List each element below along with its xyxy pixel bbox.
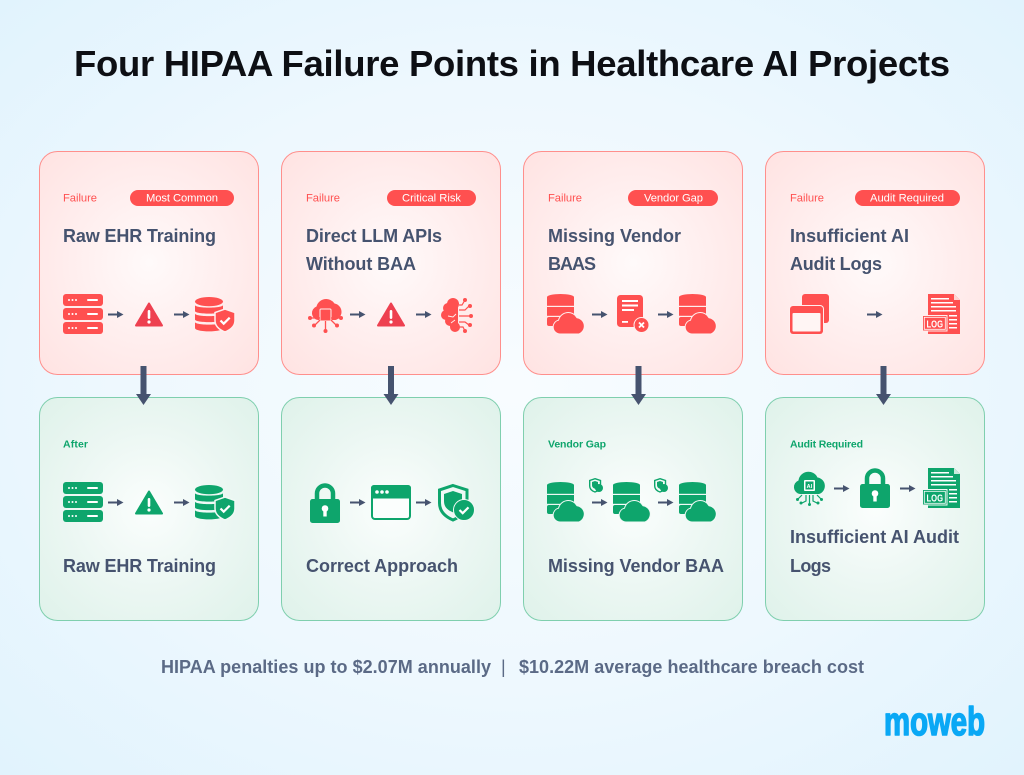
badge: audit required: Audit Required xyxy=(870,192,944,204)
arrow xyxy=(592,314,602,316)
icon: server rack xyxy=(63,482,103,522)
panel: fix 3 vendor gap xyxy=(524,398,742,620)
heading: Raw EHR Training xyxy=(63,556,216,576)
panel: failure 2 direct LLM APIs xyxy=(282,152,500,374)
heading line two: BAAS xyxy=(548,254,596,274)
icon: cloud network xyxy=(308,299,343,333)
arrow xyxy=(658,314,668,316)
badge: critical risk: Critical Risk xyxy=(402,192,461,204)
arrow xyxy=(834,488,844,490)
arrow: failure 4 to audit logs xyxy=(876,366,891,405)
label: after: After xyxy=(63,438,88,450)
heading: Missing Vendor xyxy=(548,226,681,246)
icon: database cloud xyxy=(679,294,716,334)
icon: log document: LOG xyxy=(926,318,943,330)
icon: database cloud xyxy=(679,482,716,522)
label: audit required: Audit Required xyxy=(790,438,863,450)
icon: log document xyxy=(922,294,960,334)
heading: Correct Approach xyxy=(306,556,458,576)
icon: warning triangle xyxy=(136,304,162,326)
arrow xyxy=(108,502,118,504)
arrow: failure 2 to correct approach xyxy=(384,366,398,405)
logo: moweb: moweb xyxy=(884,700,985,744)
arrow xyxy=(416,502,426,504)
arrow xyxy=(350,502,360,504)
arrow xyxy=(592,502,602,504)
heading line two: Without BAA xyxy=(306,254,416,274)
arrow: failure 1 to after xyxy=(136,366,151,405)
heading line two: Logs xyxy=(790,556,831,576)
icon: database with shield xyxy=(195,485,235,520)
arrow xyxy=(174,502,184,504)
arrow xyxy=(108,314,118,316)
label: failure: Failure xyxy=(63,192,97,204)
footer statistics: | xyxy=(501,657,506,677)
icon: browser window xyxy=(371,485,411,519)
panel: failure 3 missing vendor BAAS xyxy=(524,152,742,374)
icon: small shield xyxy=(655,479,668,492)
panel: fix 4 audit required xyxy=(766,398,984,620)
heading: Direct LLM APIs xyxy=(306,226,442,246)
icon: log document: LOG xyxy=(926,492,943,504)
icon: double shield with check xyxy=(440,486,474,520)
icon: database cloud xyxy=(547,482,584,522)
icon: database with shield xyxy=(195,297,235,332)
icon: AI cloud chip: AI xyxy=(807,484,813,490)
icon: server rack xyxy=(63,294,103,334)
label: failure: Failure xyxy=(790,192,824,204)
arrow xyxy=(900,488,910,490)
badge: audit required xyxy=(855,190,960,206)
badge: vendor gap xyxy=(628,190,718,206)
badge: most common: Most Common xyxy=(146,192,218,204)
icon: small shield xyxy=(590,479,603,492)
badge: most common xyxy=(130,190,234,206)
label: failure: Failure xyxy=(548,192,582,204)
icon: warning triangle xyxy=(378,304,404,326)
label: failure: Failure xyxy=(306,192,340,204)
footer statistics xyxy=(161,657,864,677)
arrow xyxy=(658,502,668,504)
badge: critical risk xyxy=(387,190,476,206)
icon: warning triangle xyxy=(136,492,162,514)
footer statistics: $10.22M average healthcare breach cost xyxy=(519,657,864,677)
heading: Raw EHR Training xyxy=(63,226,216,246)
arrow: failure 3 to vendor BAA xyxy=(631,366,646,405)
label: vendor gap: Vendor Gap xyxy=(548,438,606,450)
icon: AI cloud chip xyxy=(794,472,825,506)
icon: log document xyxy=(922,468,960,508)
panel: fix 2 correct approach xyxy=(282,398,500,620)
icon: document with x xyxy=(617,295,649,332)
panel: failure 1 raw EHR training xyxy=(40,152,258,374)
heading line two: Audit Logs xyxy=(790,254,882,274)
icon: padlock xyxy=(310,486,340,523)
panel: fix 1 after xyxy=(40,398,258,620)
panel: failure 4 insufficient AI audit logs xyxy=(766,152,984,374)
icon: database cloud xyxy=(547,294,584,334)
title: Four HIPAA Failure Points in Healthcare AI Projects xyxy=(74,43,950,84)
icon: stacked windows xyxy=(789,294,829,335)
arrow xyxy=(867,314,877,316)
heading: Missing Vendor BAA xyxy=(548,556,724,576)
arrow xyxy=(350,314,360,316)
heading: Insufficient AI xyxy=(790,226,909,246)
icon: database cloud xyxy=(613,482,650,522)
heading: Insufficient AI Audit xyxy=(790,527,959,547)
arrow xyxy=(416,314,426,316)
badge: vendor gap: Vendor Gap xyxy=(644,192,703,204)
icon: AI brain circuit xyxy=(441,298,473,333)
icon: padlock xyxy=(860,470,890,508)
arrow xyxy=(174,314,184,316)
footer statistics: HIPAA penalties up to $2.07M annually xyxy=(161,657,491,677)
